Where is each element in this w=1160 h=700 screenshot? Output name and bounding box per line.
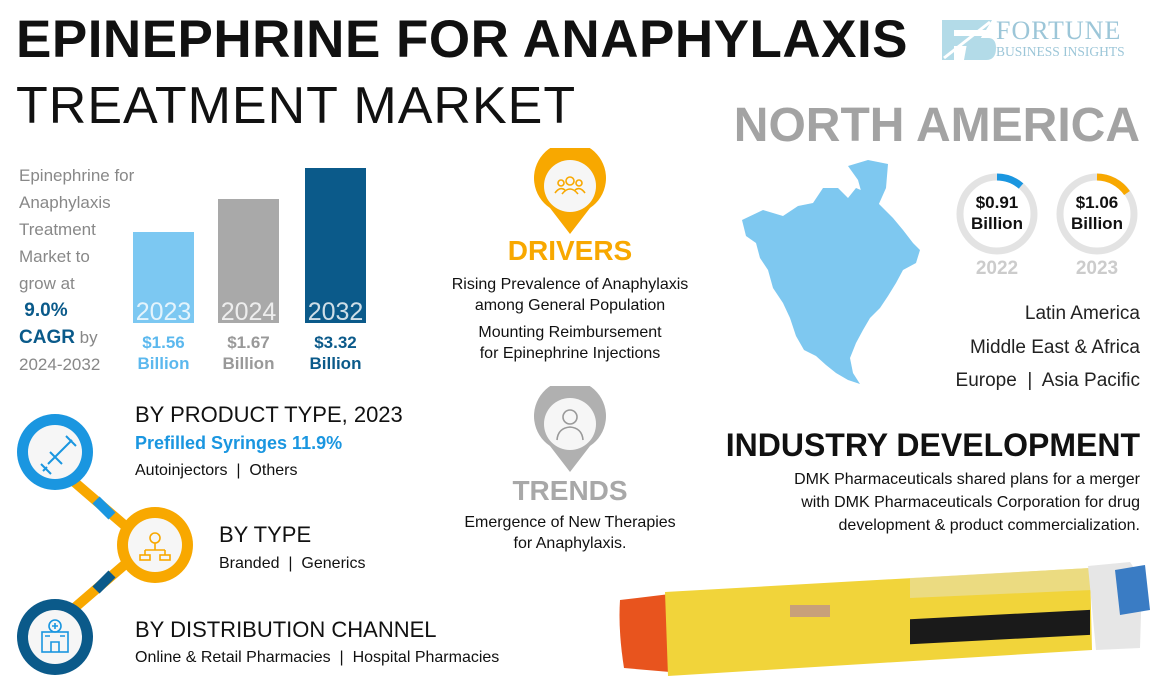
industry development: DMK Pharmaceuticals shared plans for a merger <box>794 471 1140 488</box>
map: north america <box>742 160 920 384</box>
growth text <box>19 166 134 374</box>
title: EPINEPHRINE FOR ANAPHYLAXIS <box>16 10 908 69</box>
industry development: with DMK Pharmaceuticals Corporation for drug <box>801 494 1140 511</box>
bar chart <box>133 168 366 373</box>
regions: Middle East & Africa <box>970 336 1140 358</box>
drivers: for Epinephrine Injections <box>480 345 660 362</box>
title: TREATMENT MARKET <box>16 77 576 135</box>
growth text: grow at <box>19 274 75 293</box>
drivers: DRIVERS <box>508 235 632 266</box>
north america heading: NORTH AMERICA <box>734 99 1140 152</box>
segment: distribution <box>135 617 499 666</box>
autoinjector image <box>620 562 1150 676</box>
drivers: Rising Prevalence of Anaphylaxis <box>452 276 688 293</box>
donut 2022: $0.91 <box>976 193 1018 212</box>
growth text: Epinephrine for <box>19 166 134 185</box>
icon: trends pin <box>534 386 606 472</box>
bar chart: $1.67 <box>227 333 270 352</box>
trends: for Anaphylaxis. <box>514 535 626 552</box>
segment: product type <box>135 402 403 479</box>
segment: type <box>219 522 365 572</box>
growth text: 2024-2032 <box>19 355 100 374</box>
bar chart: Billion <box>310 354 361 373</box>
growth text: CAGR by <box>19 327 98 348</box>
regions <box>956 303 1140 391</box>
growth text: Anaphylaxis <box>19 193 111 212</box>
logo <box>942 16 1125 60</box>
trends: TRENDS <box>512 475 628 506</box>
donut 2023: Billion <box>1071 214 1123 233</box>
drivers: among General Population <box>475 297 665 314</box>
donut 2022: Billion <box>971 214 1023 233</box>
icon: drivers pin <box>534 148 606 234</box>
growth text: 9.0% <box>24 300 68 321</box>
donut 2022: 2022 <box>976 258 1018 279</box>
growth text: Market to <box>19 247 90 266</box>
donut 2023: 2023 <box>1076 258 1118 279</box>
segment: product type: BY PRODUCT TYPE, 2023 <box>135 402 403 427</box>
trends: Emergence of New Therapies <box>464 514 676 531</box>
segment: type: BY TYPE <box>219 522 311 547</box>
segment: type: Branded | Generics <box>219 555 365 572</box>
donut 2023 <box>1056 174 1138 279</box>
donut 2022 <box>956 174 1038 279</box>
bar chart: Billion <box>138 354 189 373</box>
bar chart: Billion <box>223 354 274 373</box>
segment: distribution: BY DISTRIBUTION CHANNEL <box>135 617 437 642</box>
donut 2023: $1.06 <box>1076 193 1118 212</box>
trends <box>464 475 676 552</box>
segment: product type: Prefilled Syringes 11.9% <box>135 433 342 453</box>
regions: Latin America <box>1025 303 1140 324</box>
logo: BUSINESS INSIGHTS <box>996 44 1125 59</box>
bar chart: $1.56 <box>142 333 185 352</box>
bar chart: 2032 <box>308 298 363 326</box>
bar chart: 2023 <box>136 298 191 326</box>
drivers <box>452 235 688 362</box>
industry development <box>726 427 1140 534</box>
bar chart: 2024 <box>221 298 276 326</box>
segment: distribution: Online & Retail Pharmacies | Hospital Pharmacies <box>135 649 499 666</box>
drivers: Mounting Reimbursement <box>478 324 662 341</box>
segment circles <box>17 414 193 675</box>
title <box>16 10 908 135</box>
segment: product type: Autoinjectors | Others <box>135 462 297 479</box>
logo: FORTUNE <box>996 16 1121 45</box>
growth text: Treatment <box>19 220 96 239</box>
industry development: INDUSTRY DEVELOPMENT <box>726 427 1140 463</box>
bar chart: $3.32 <box>314 333 357 352</box>
regions: Europe | Asia Pacific <box>956 370 1140 391</box>
industry development: development & product commercialization. <box>839 517 1140 534</box>
